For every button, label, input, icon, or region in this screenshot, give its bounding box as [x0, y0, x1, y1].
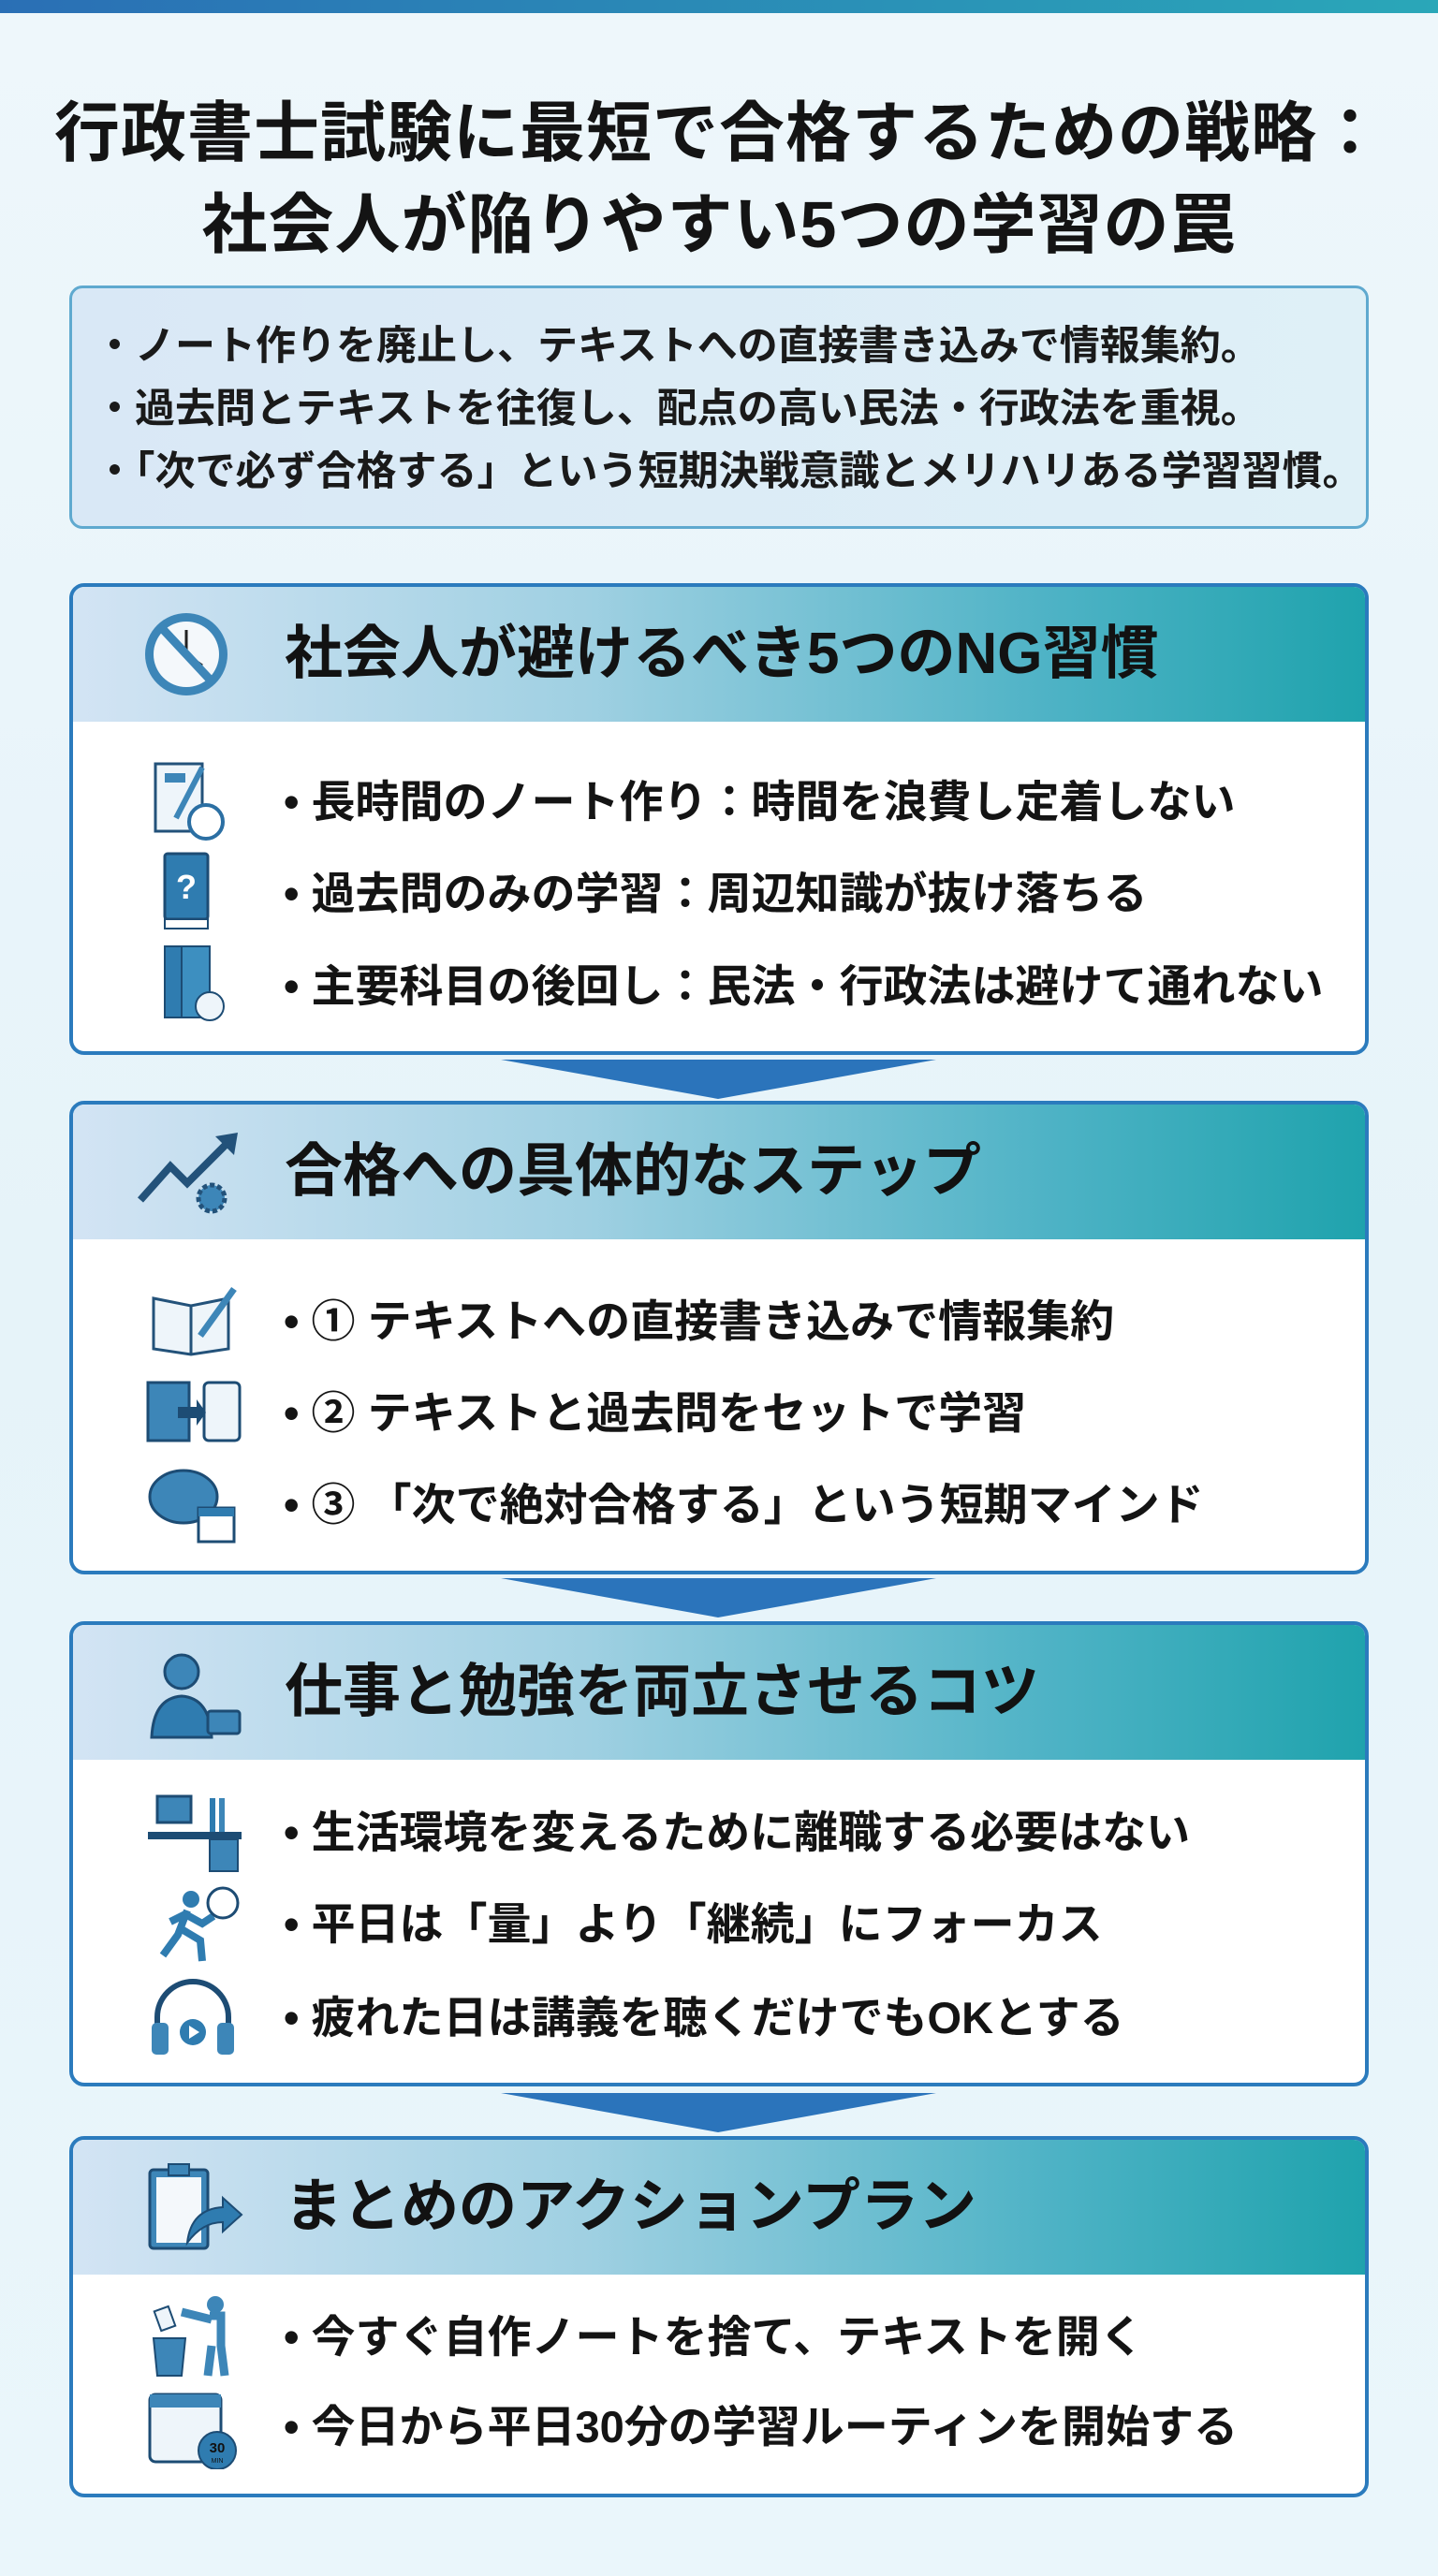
item 2: ?	[176, 868, 197, 906]
summary box: ・ノート作りを廃止し、テキストへの直接書き込みで情報集約。	[95, 324, 1261, 369]
header: balance	[73, 1625, 1365, 1760]
summary box	[69, 285, 1369, 529]
panel: NG habits	[69, 583, 1369, 1055]
action 2: 30	[210, 2440, 225, 2456]
title	[54, 96, 1384, 261]
icon: prohibited clock	[145, 613, 227, 695]
title: 行政書士試験に最短で合格するための戦略：	[54, 96, 1384, 169]
action 1	[152, 2296, 1144, 2377]
item 3: • 主要科目の後回し：民法・行政法は避けて通れない	[284, 961, 1324, 1011]
step 2	[146, 1382, 1026, 1442]
item 3	[164, 945, 1324, 1021]
header: steps	[73, 1105, 1365, 1239]
tip 3	[152, 1979, 1124, 2055]
item 2: • 過去問のみの学習：周辺知識が抜け落ちる	[284, 869, 1148, 918]
step 1: • ① テキストへの直接書き込みで情報集約	[284, 1296, 1114, 1346]
header: NG habits	[73, 587, 1365, 722]
panel: steps	[69, 1101, 1369, 1574]
panel: work-study balance	[69, 1621, 1369, 2086]
item 1: • 長時間のノート作り：時間を浪費し定着しない	[284, 777, 1236, 827]
summary box: ・過去問とテキストを往復し、配点の高い民法・行政法を重視。	[95, 387, 1261, 432]
heading: まとめのアクションプラン	[285, 2174, 976, 2239]
action 2: MIN	[212, 2458, 223, 2465]
tip 3: • 疲れた日は講義を聴くだけでもOKとする	[284, 1993, 1124, 2042]
action 2	[148, 2393, 1238, 2469]
tip 1	[148, 1795, 1190, 1872]
action 2: • 今日から平日30分の学習ルーティンを開始する	[284, 2402, 1238, 2452]
tip 1: • 生活環境を変えるために離職する必要はない	[284, 1808, 1190, 1857]
step 1	[152, 1287, 1114, 1355]
action 1: • 今すぐ自作ノートを捨て、テキストを開く	[284, 2312, 1144, 2362]
item 1	[154, 762, 1236, 841]
arrow 3	[501, 2093, 936, 2132]
heading: 合格への具体的なステップ	[285, 1139, 981, 1204]
arrow 1	[501, 1060, 936, 1099]
icon: clipboard arrow	[148, 2163, 243, 2250]
heading: 社会人が避けるべき5つのNG習慣	[285, 622, 1158, 686]
arrow 2	[501, 1578, 936, 1617]
tip 2	[159, 1887, 1103, 1962]
icon: growth gear	[138, 1133, 238, 1213]
step 2: • ② テキストと過去問をセットで学習	[284, 1388, 1026, 1438]
tip 2: • 平日は「量」より「継続」にフォーカス	[284, 1899, 1103, 1949]
panel: action plan	[69, 2136, 1369, 2497]
summary box: ・「次で必ず合格する」という短期決戦意識とメリハリある学習習慣。	[95, 449, 1363, 494]
title: 社会人が陥りやすい5つの学習の罠	[202, 188, 1236, 261]
step 3	[148, 1470, 1204, 1543]
icon: businessperson	[150, 1653, 242, 1739]
header: action plan	[73, 2140, 1365, 2275]
heading: 仕事と勉強を両立させるコツ	[285, 1660, 1039, 1724]
step 3: • ③ 「次で絶対合格する」という短期マインド	[284, 1480, 1204, 1530]
item 2	[163, 852, 1148, 929]
